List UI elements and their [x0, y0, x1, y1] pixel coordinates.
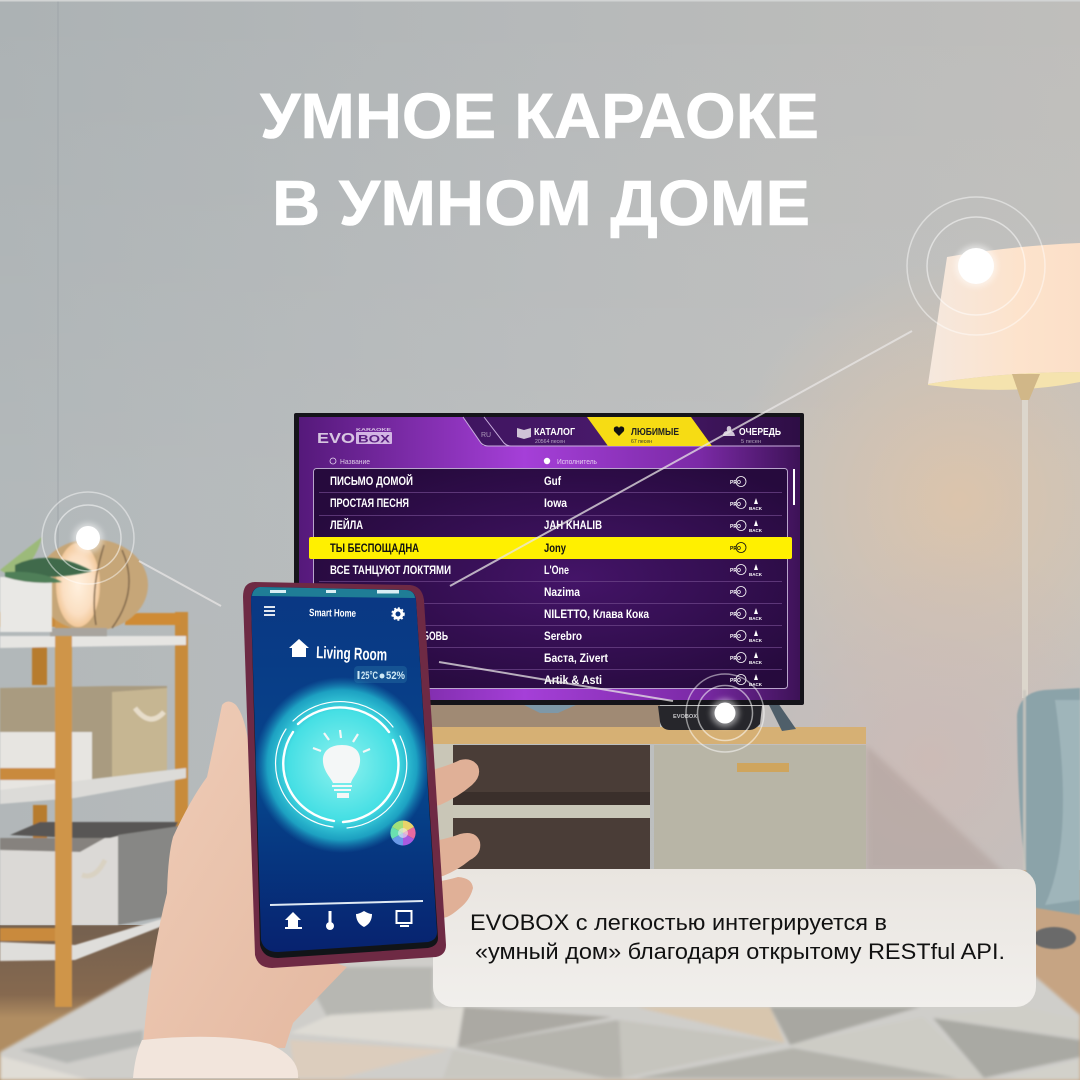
icon: catalog book [517, 428, 531, 439]
song titles: ЛЕЙЛА [330, 519, 363, 532]
nav icon: thermometer [326, 911, 334, 930]
artists: Serebro [544, 631, 582, 643]
nav icon: monitor [396, 911, 412, 927]
PRO badges: PRO [730, 590, 741, 596]
BACK badges: BACK [749, 616, 763, 621]
open shelves [453, 745, 650, 869]
artists: Guf [544, 476, 561, 488]
light glow [254, 677, 430, 853]
app title: Smart Home [309, 607, 356, 620]
lower shelf [0, 918, 165, 961]
icon: queue people [723, 426, 735, 436]
dial rings [276, 702, 407, 828]
hotspot: table lamp [42, 492, 134, 584]
artists: Баста, Zivert [544, 653, 608, 665]
artists [544, 476, 650, 687]
TV frame [294, 413, 804, 705]
BACK badges: BACK [749, 638, 763, 643]
hotspot: floor lamp [907, 197, 1045, 335]
song list panel [314, 468, 788, 688]
screen [251, 587, 437, 952]
top tab bar [317, 417, 800, 447]
artists: NILETTO, Клава Кока [544, 609, 650, 621]
gray basket [10, 822, 180, 925]
room name: Living Room [316, 643, 387, 664]
PRO badges: PRO [730, 678, 741, 684]
icon: house [289, 639, 309, 657]
climate badge: 25°C [361, 670, 378, 682]
nav divider [270, 901, 423, 905]
hotspot: EVOBOX device [686, 674, 764, 752]
top rail [0, 612, 55, 627]
song titles [330, 475, 451, 643]
top tab bar: КАТАЛОГ [534, 426, 575, 438]
title [260, 80, 819, 239]
callout text [470, 910, 1005, 964]
icon: light bulb [313, 730, 370, 798]
TV stand [430, 727, 866, 869]
PRO badges: PRO [730, 656, 741, 662]
row separators [319, 492, 782, 670]
callout text: «умный дом» благодаря открытому RESTful API. [475, 939, 1005, 964]
logo [317, 427, 392, 447]
artists: Nazima [544, 587, 581, 599]
TV [294, 413, 804, 705]
armchair right [1017, 688, 1080, 949]
cabinet door [654, 745, 866, 869]
front upright [55, 612, 72, 1007]
top tab bar: ОЧЕРЕДЬ [739, 426, 781, 438]
left shelf with baskets [0, 612, 188, 1007]
lamp shade [928, 243, 1080, 384]
EVOBOX device [658, 706, 762, 730]
middle shelf [0, 768, 186, 804]
nav icon: shield [356, 911, 372, 927]
BACK badges: BACK [749, 660, 763, 665]
song titles: ПИСЬМО ДОМОЙ [330, 475, 413, 488]
icon: heart [614, 426, 624, 436]
song titles: ВСЕ ТАНЦУЮТ ЛОКТЯМИ [330, 565, 451, 577]
artists: JAH KHALIB [544, 520, 602, 532]
callout text: EVOBOX с легкостью интегрируется в [470, 910, 887, 935]
icon: settings gear [392, 608, 404, 620]
screen [299, 417, 800, 700]
PRO badges [730, 476, 746, 684]
climate badge [354, 666, 407, 683]
BACK badges: BACK [749, 528, 763, 533]
top tab bar: RU [481, 432, 491, 439]
logo: KARAOKE [356, 427, 391, 432]
sort options [330, 457, 597, 466]
fingers [425, 759, 480, 920]
EVOBOX device: EVOBOX [673, 714, 698, 720]
colour wheel [390, 820, 416, 846]
title: В УМНОМ ДОМЕ [272, 167, 810, 239]
sort options: Исполнитель [557, 457, 597, 466]
connector lines [139, 331, 912, 701]
PRO badges: PRO [730, 612, 741, 618]
hand holding phone [133, 702, 480, 1078]
door handle [737, 763, 789, 772]
PRO badges: PRO [730, 634, 741, 640]
climate badge: 52% [386, 670, 405, 682]
scrollbar [793, 469, 795, 505]
TV stand feet [522, 703, 796, 731]
artists: Iowa [544, 498, 568, 510]
white box [0, 732, 92, 792]
floor and carpet [0, 870, 1080, 1080]
BACK badges [749, 498, 763, 687]
icon: menu [264, 607, 275, 615]
phone case [243, 582, 446, 968]
highlighted row [309, 537, 792, 559]
floor lamp right [928, 243, 1080, 698]
beige basket [0, 686, 167, 780]
top tab bar: 67 песен [631, 439, 652, 445]
song titles: ПРОСТАЯ ПЕСНЯ [330, 498, 409, 510]
BACK badges: BACK [749, 682, 763, 687]
BACK badges: BACK [749, 506, 763, 511]
artists: L'One [544, 565, 569, 577]
nav icon: home [285, 912, 302, 929]
artists: Jony [544, 543, 566, 555]
plant in white pot [0, 537, 92, 632]
top shelf [0, 636, 186, 648]
reflection strip behind TV [430, 705, 660, 728]
white basket [0, 836, 118, 925]
song titles: ТЫ БЕСПОЩАДНА [330, 543, 419, 555]
title: УМНОЕ КАРАОКЕ [260, 80, 819, 152]
screen bezel [251, 587, 438, 958]
artists: Artik & Asti [544, 675, 602, 687]
BACK badges: BACK [749, 572, 763, 577]
logo: EVO [317, 430, 355, 447]
PRO badges: PRO [730, 568, 741, 574]
callout panel [433, 869, 1036, 1007]
PRO badges: PRO [730, 524, 741, 530]
back posts and rails [32, 612, 188, 840]
status bar [252, 587, 415, 598]
palm and thumb [143, 702, 347, 1048]
table lantern lamp [36, 539, 148, 636]
top tab bar: ЛЮБИМЫЕ [631, 426, 679, 438]
PRO badges: PRO [730, 480, 741, 486]
smartphone [243, 582, 446, 968]
sleeve cuff [133, 1037, 298, 1078]
logo: BOX [358, 434, 391, 446]
top tab bar: 5 песен [741, 439, 761, 445]
sort options: Название [340, 457, 370, 466]
yellow tab [587, 417, 712, 446]
top tab bar: 20564 песен [535, 439, 565, 445]
song titles: ЛЮБОВЬ [408, 631, 448, 643]
PRO badges: PRO [730, 502, 741, 508]
PRO badges: PRO [730, 546, 741, 552]
